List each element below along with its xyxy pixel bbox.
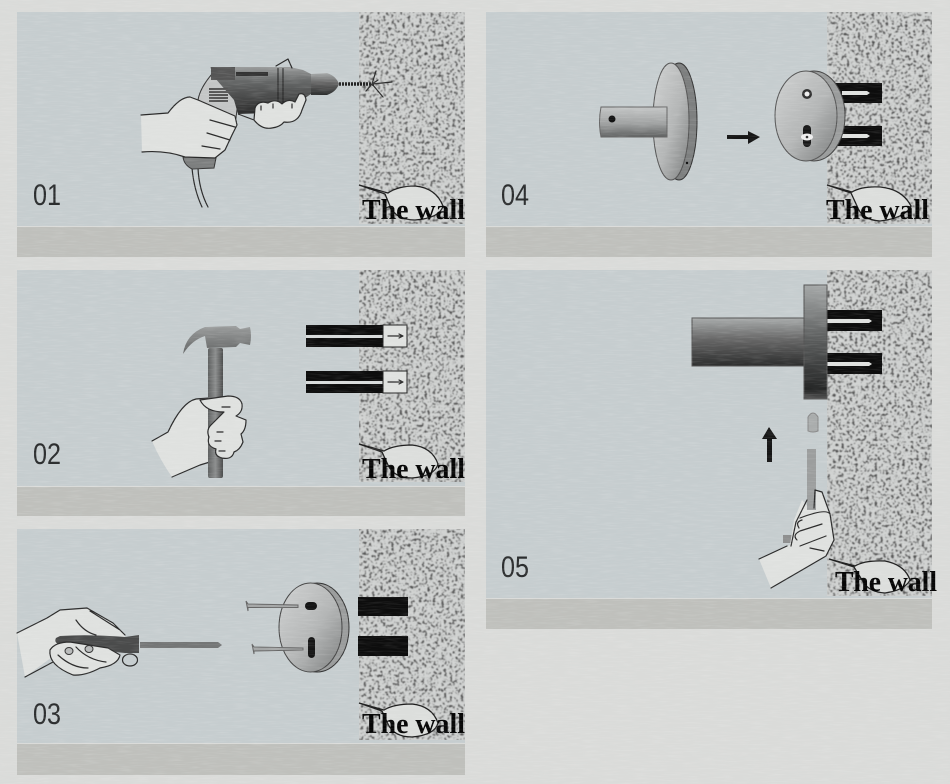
callout: the wall: The wall — [826, 195, 929, 226]
wall: step 01 — [359, 12, 465, 224]
callout: the wall: The wall — [362, 709, 465, 740]
icon: mounting plate with screws — [246, 583, 349, 672]
arrow: right — [727, 131, 760, 144]
panel: step 01 drill — [17, 12, 465, 257]
icon: screwdriver in hand — [17, 608, 222, 677]
icon: set screw — [808, 413, 818, 432]
panel: step 02 hammer — [17, 270, 465, 516]
step number 04: 04 — [501, 179, 529, 212]
panel: step 05 fixing — [486, 270, 937, 629]
icon: hammer in hand — [152, 326, 251, 478]
step number 02: 02 — [33, 438, 61, 471]
wall: step 02 — [359, 270, 465, 482]
wall: step 05 — [827, 270, 932, 596]
icon: wall anchors behind plate — [835, 83, 882, 146]
callout: the wall: The wall — [362, 454, 465, 485]
panel: step 03 screwdriver — [17, 529, 465, 775]
step number 01: 01 — [33, 179, 61, 212]
icon: towel bar and bracket — [692, 285, 827, 399]
arrow: up — [762, 427, 777, 462]
icon: hex key in hand — [759, 449, 834, 588]
callout: the wall: The wall — [835, 567, 937, 598]
icon: anchors in wall — [827, 310, 882, 374]
step number 05: 05 — [501, 551, 529, 584]
panel: step 04 plate mounting — [486, 12, 932, 257]
wall: step 04 — [827, 12, 932, 224]
wall: step 03 — [359, 529, 465, 740]
icon: drill in hand — [141, 59, 392, 207]
callout: the wall: The wall — [362, 195, 465, 226]
icon: black wall holes — [358, 597, 408, 656]
icon: towel bar bracket side view — [600, 63, 697, 180]
step number 03: 03 — [33, 698, 61, 731]
icon: wall anchors with arrows — [306, 325, 407, 393]
icon: mounting plate on wall — [775, 71, 845, 161]
